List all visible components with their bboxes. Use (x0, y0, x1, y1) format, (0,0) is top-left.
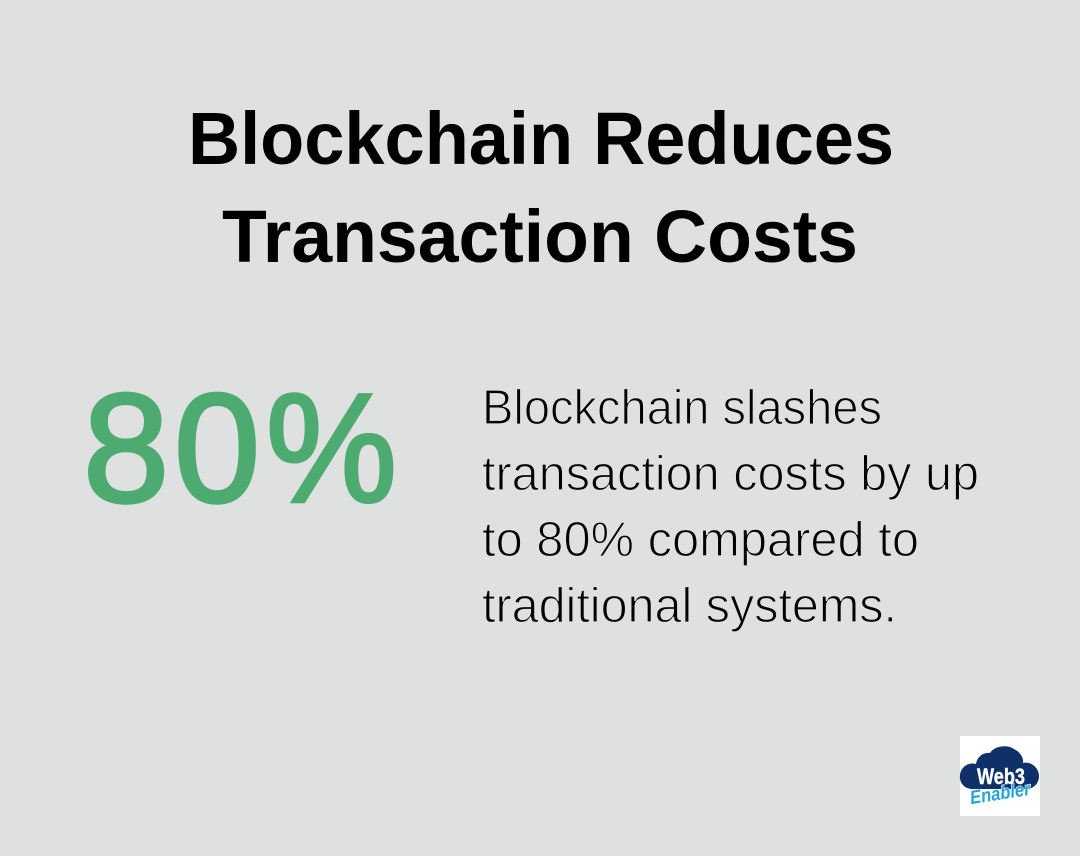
icon: cloud (960, 746, 1039, 789)
description text: Blockchain slashes (482, 381, 882, 435)
logo script: Enabler (969, 779, 1033, 809)
description text: to 80% compared to (482, 513, 919, 567)
logo: Web3 Enabler (960, 736, 1040, 816)
description text (482, 381, 979, 633)
statistic: 80% (83, 362, 397, 534)
description text: traditional systems. (482, 579, 897, 633)
statistic: 80%: 8 (83, 362, 169, 534)
title (188, 97, 894, 278)
title: Transaction Costs (222, 195, 858, 278)
description text: transaction costs by up (482, 447, 979, 501)
title: Blockchain Reduces (188, 97, 894, 180)
logo wordmark: Web3 (977, 764, 1025, 789)
statistic: 80%: % (266, 362, 397, 534)
statistic: 80%: 0 (174, 362, 260, 534)
